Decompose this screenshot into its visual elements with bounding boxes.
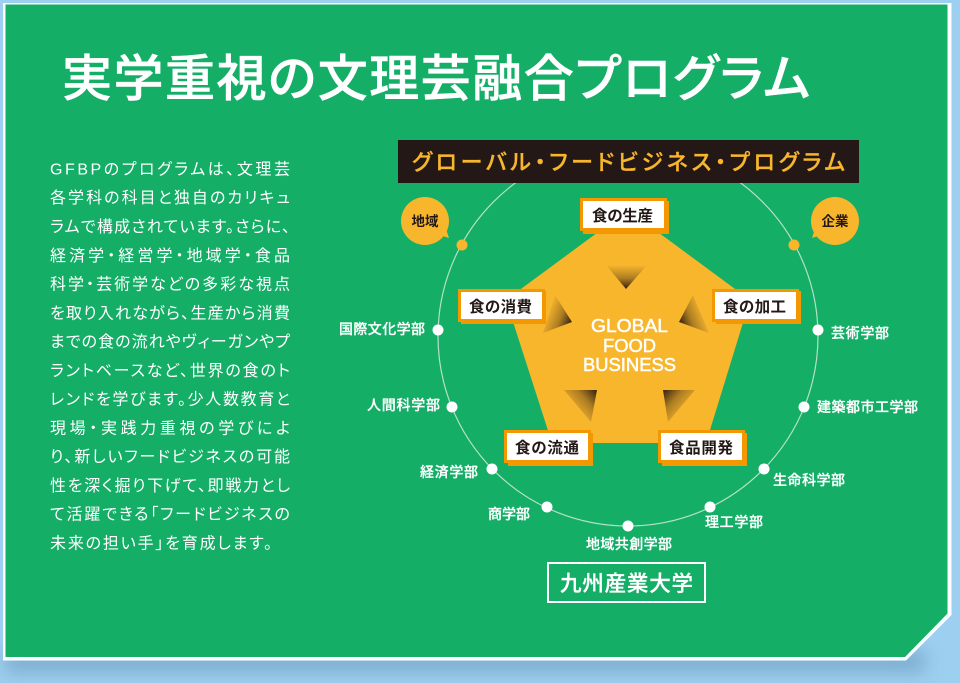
body text block: り、新しいフードビジネスの可能 [50, 448, 290, 466]
body text block: ラムで構成されています。さらに、 [50, 218, 290, 236]
faculty labels: 国際文化学部 [339, 321, 425, 337]
bubble: 地域: 地域 [412, 213, 439, 229]
label: 食の流通 [506, 432, 593, 466]
faculty labels: 人間科学部 [367, 397, 440, 413]
label: 食の加工: 食の加工 [723, 297, 786, 316]
body text block: までの食の流れやヴィーガンやプ [50, 333, 290, 351]
university box: 九州産業大学 [560, 572, 693, 596]
program ring [438, 146, 818, 526]
label: 食品開発 [660, 432, 747, 466]
bubble: 企業 [811, 197, 859, 245]
faculty labels: 生命科学部 [773, 472, 845, 488]
body text block: GFBPのプログラムは、文理芸 [50, 160, 290, 178]
body text block [50, 160, 290, 552]
bubble: 企業: 企業 [822, 213, 849, 229]
body text block: 性を深く掘り下げて、即戦力とし [50, 477, 290, 495]
panel shadow [5, 650, 925, 672]
label: 食の消費 [460, 290, 546, 324]
body text block: 科学・芸術学などの多彩な視点 [50, 276, 290, 294]
label: 食の消費: 食の消費 [469, 297, 532, 316]
centre text: BUSINESS [583, 355, 676, 375]
body text block: レンドを学びます。少人数教育と [50, 390, 290, 408]
faculty labels: 理工学部 [705, 514, 763, 530]
program banner [398, 140, 859, 183]
faculty labels: 建築都市工学部 [817, 399, 918, 415]
bubble: 地域 [401, 197, 449, 245]
faculty labels: 商学部 [488, 506, 530, 522]
label: 食の生産 [582, 200, 669, 234]
label: 食品開発: 食品開発 [669, 438, 733, 457]
body text block: を取り入れながら、生産から消費 [50, 304, 290, 322]
ring connector dots: orange [456, 240, 800, 250]
centre text: GLOBAL [591, 316, 668, 336]
label: 食の流通: 食の流通 [515, 438, 579, 457]
body text block: 未来の担い手」を育成します。 [50, 534, 272, 552]
title: 実学重視の文理芸融合プログラム [62, 51, 810, 107]
body text block: 現場・実践力重視の学びによ [50, 420, 290, 438]
faculty labels: 地域共創学部 [586, 536, 672, 552]
arrows converging on centre [543, 265, 709, 422]
label: 食の生産: 食の生産 [592, 206, 653, 225]
faculty nodes [432, 324, 824, 532]
faculty labels [339, 321, 918, 552]
university box [548, 563, 705, 602]
body text block: て活躍できる「フードビジネスの [50, 506, 290, 524]
pentagon [506, 210, 750, 443]
body text block: ラントベースなど、世界の食のト [50, 362, 290, 380]
centre text [583, 316, 676, 375]
body text block: 各学科の科目と独自のカリキュ [50, 189, 290, 207]
centre text: FOOD [603, 336, 656, 356]
label: 食の加工 [714, 290, 801, 324]
faculty labels: 経済学部 [420, 464, 478, 480]
program banner: グローバル・フードビジネス・プログラム [412, 150, 845, 175]
body text block: 経済学・経営学・地域学・食品 [50, 247, 290, 265]
faculty labels: 芸術学部 [831, 325, 889, 341]
